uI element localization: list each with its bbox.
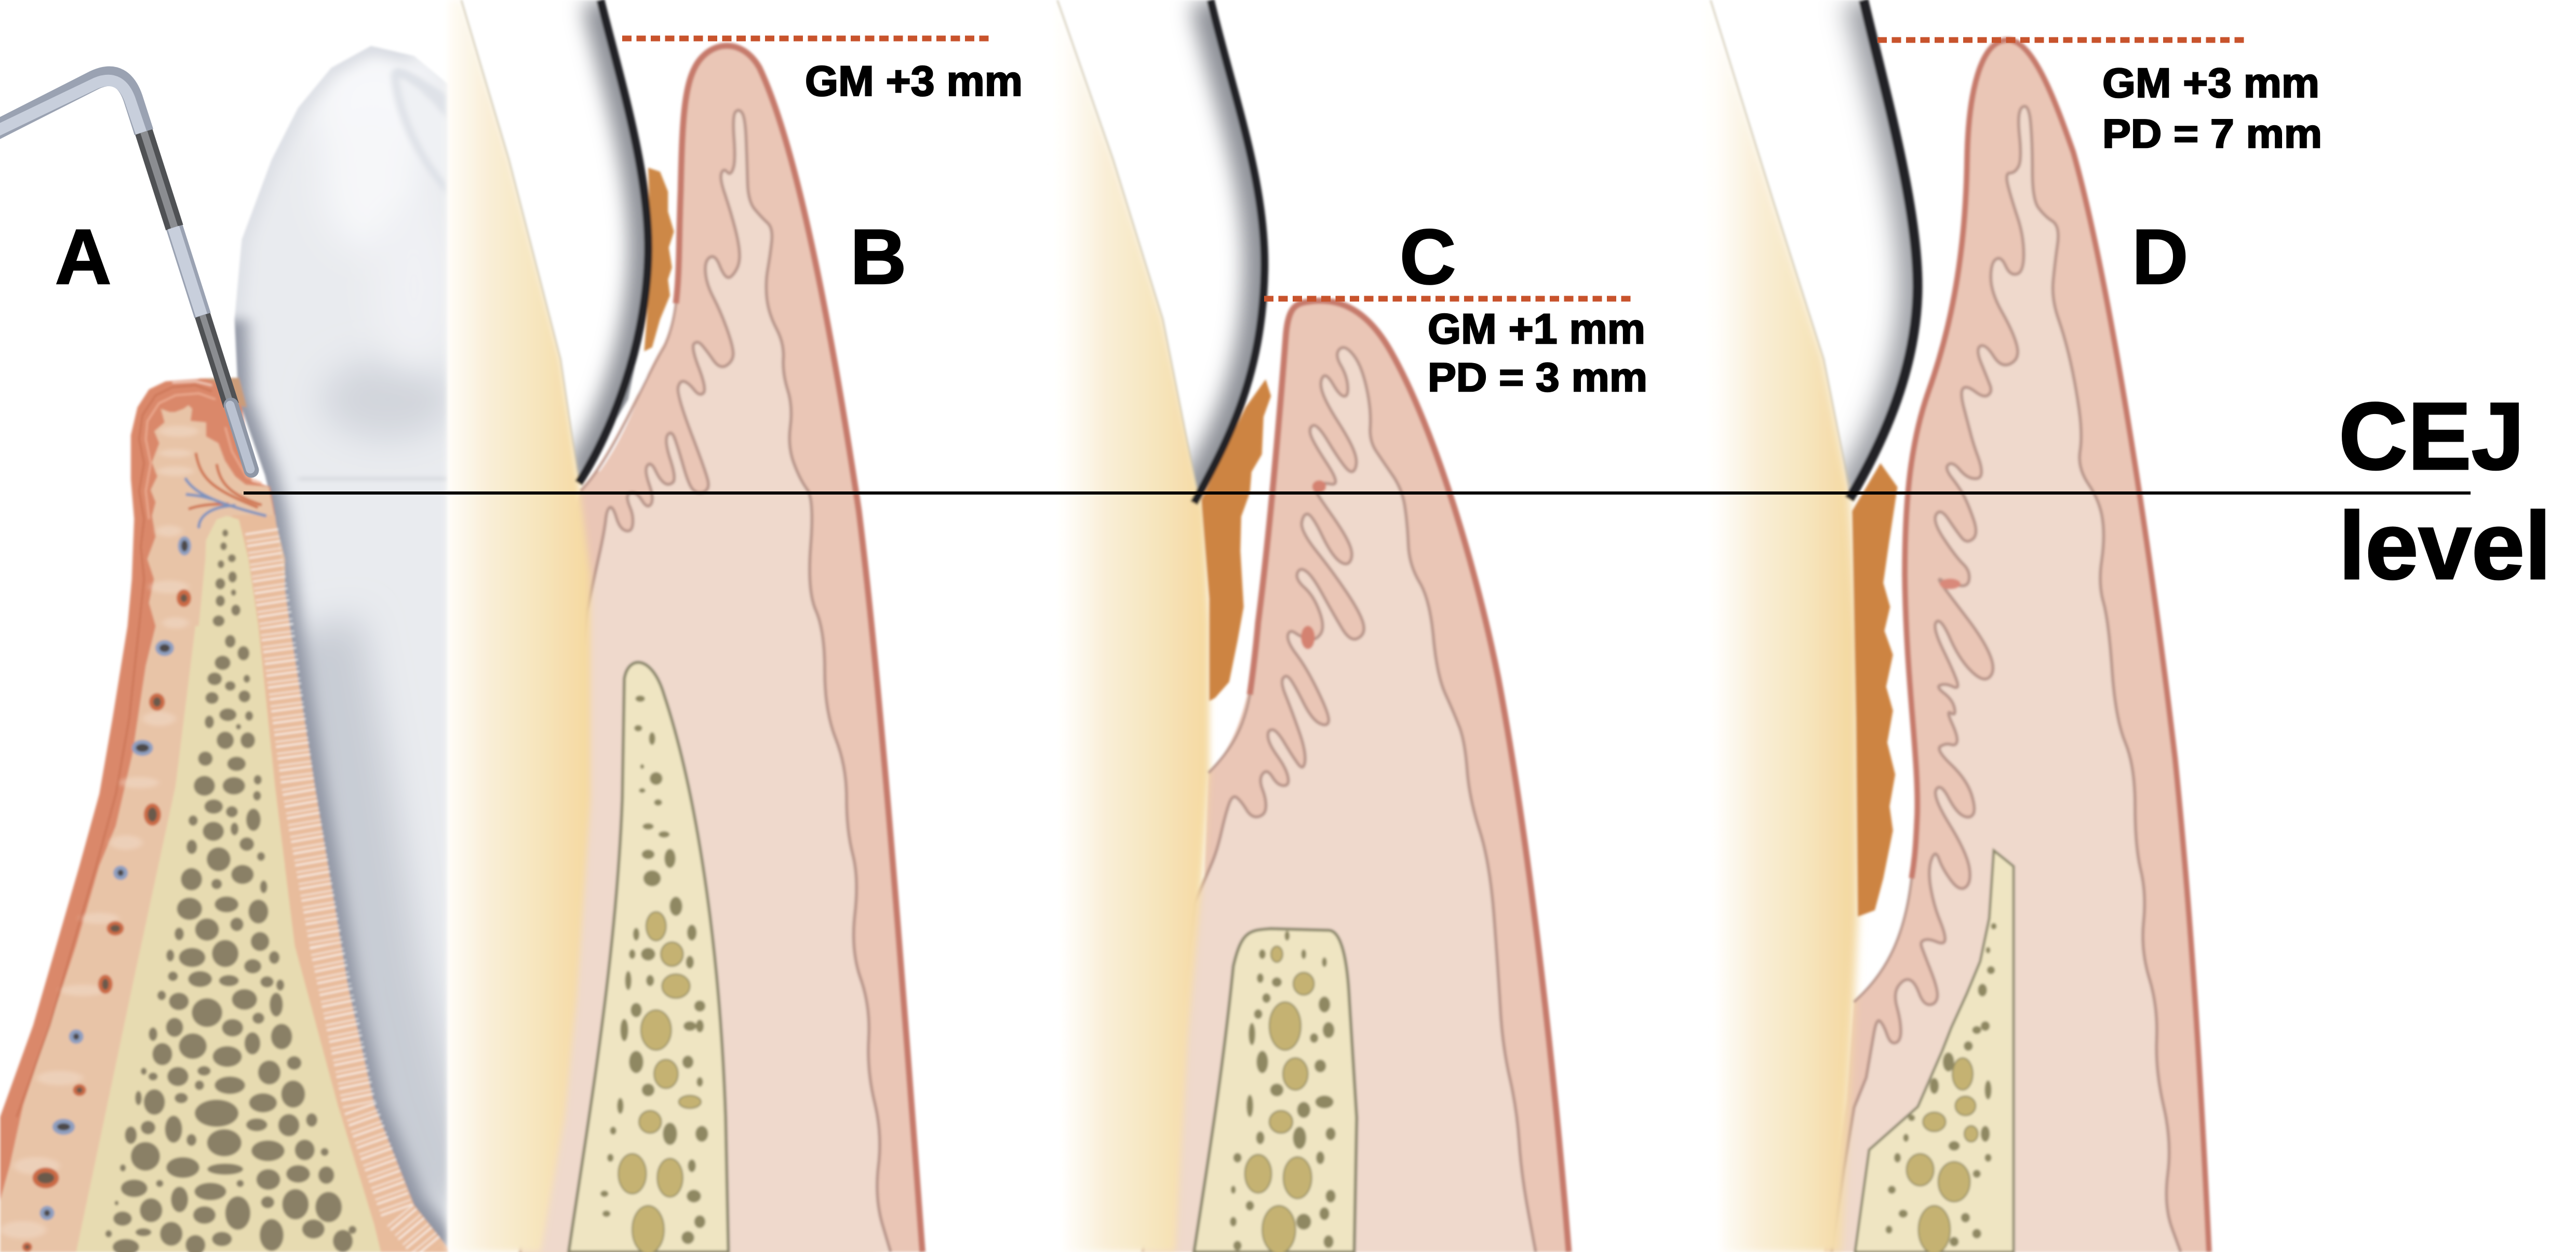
- bone spaces C: [1230, 931, 1336, 1250]
- bone spaces D: [1886, 923, 1996, 1246]
- CEJ reference line: [244, 491, 2471, 495]
- occlusal fossa: [391, 68, 446, 187]
- gingiva B body: [521, 46, 922, 1252]
- enamel outline D: [1849, 0, 1917, 499]
- panel D: gingival margin +3 mm, probing depth 7 mm: [1688, 0, 2322, 1252]
- root contour B: [461, 0, 579, 479]
- connective tissue mottling: [0, 425, 199, 1238]
- label CEJ level: [2339, 382, 2551, 599]
- alveolar bone D: [1855, 850, 2014, 1252]
- tooth root C: [1055, 0, 1209, 1252]
- calculus D: [1852, 463, 1898, 916]
- enamel C: [1096, 0, 1262, 489]
- gingival surface line B: [676, 46, 922, 1252]
- blood vessels A: [22, 536, 191, 1252]
- connective tissue and rete pegs C: [1143, 348, 1536, 1252]
- tooth A crown and root: [233, 46, 449, 1247]
- calculus B: [644, 168, 674, 351]
- calculus C: [1201, 379, 1271, 701]
- panel letter A: A: [55, 213, 111, 300]
- panel letter C: C: [1400, 213, 1456, 300]
- panel B: gingival margin +3 mm, no attachment loss: [441, 0, 1023, 1252]
- bone marrow spaces A: [105, 529, 356, 1252]
- alveolar bone C: [1194, 929, 1357, 1252]
- periodontal ligament: [232, 515, 448, 1252]
- gingiva D body: [1824, 40, 2209, 1252]
- enamel outline C: [1194, 0, 1265, 503]
- label PD = 7 mm: PD = 7 mm: [2102, 111, 2322, 156]
- alveolar bone B: [569, 662, 729, 1252]
- label GM +3 mm: GM +3 mm: [2102, 60, 2319, 106]
- gingiva corner behind probe: [199, 378, 247, 407]
- root contour C: [1057, 0, 1198, 495]
- label GM +3 mm: GM +3 mm: [805, 58, 1023, 105]
- gingiva A epithelium: [0, 379, 448, 1252]
- connective tissue and rete pegs D: [1832, 106, 2181, 1252]
- gingival fibres fan: [185, 453, 266, 528]
- gingiva A connective tissue: [0, 405, 285, 1252]
- gingival surface line C: [1250, 301, 1568, 1252]
- panel letter D: D: [2132, 213, 2188, 300]
- label CEJ level: level: [2339, 492, 2551, 599]
- gingival margin dotted line D: [1877, 37, 2244, 43]
- enamel D: [1744, 0, 1914, 491]
- panel A: healthy tooth with probe: [0, 0, 454, 1252]
- enamel outline B: [579, 0, 648, 483]
- panel C: gingival margin +1 mm, probing depth 3 mm: [1039, 0, 1647, 1252]
- root contour D: [1711, 0, 1849, 487]
- tooth root D: [1705, 0, 1858, 1252]
- label PD = 3 mm: PD = 3 mm: [1428, 354, 1647, 400]
- bone spaces B: [600, 696, 708, 1244]
- periodontal probe: [0, 76, 251, 470]
- label GM +1 mm: GM +1 mm: [1428, 305, 1645, 353]
- gingiva C body: [1142, 301, 1568, 1252]
- alveolar bone A: [76, 516, 381, 1252]
- tooth root B: [447, 0, 591, 1252]
- label CEJ level: CEJ: [2339, 382, 2525, 489]
- connective tissue and rete pegs B: [518, 110, 891, 1252]
- gingival surface line D: [1905, 40, 2209, 1252]
- gingival margin dotted line C: [1264, 296, 1633, 301]
- epithelial wave lines: [17, 381, 262, 1117]
- panel letter B: B: [850, 213, 906, 300]
- enamel B: [477, 0, 645, 475]
- gingival margin dotted line B: [622, 35, 990, 42]
